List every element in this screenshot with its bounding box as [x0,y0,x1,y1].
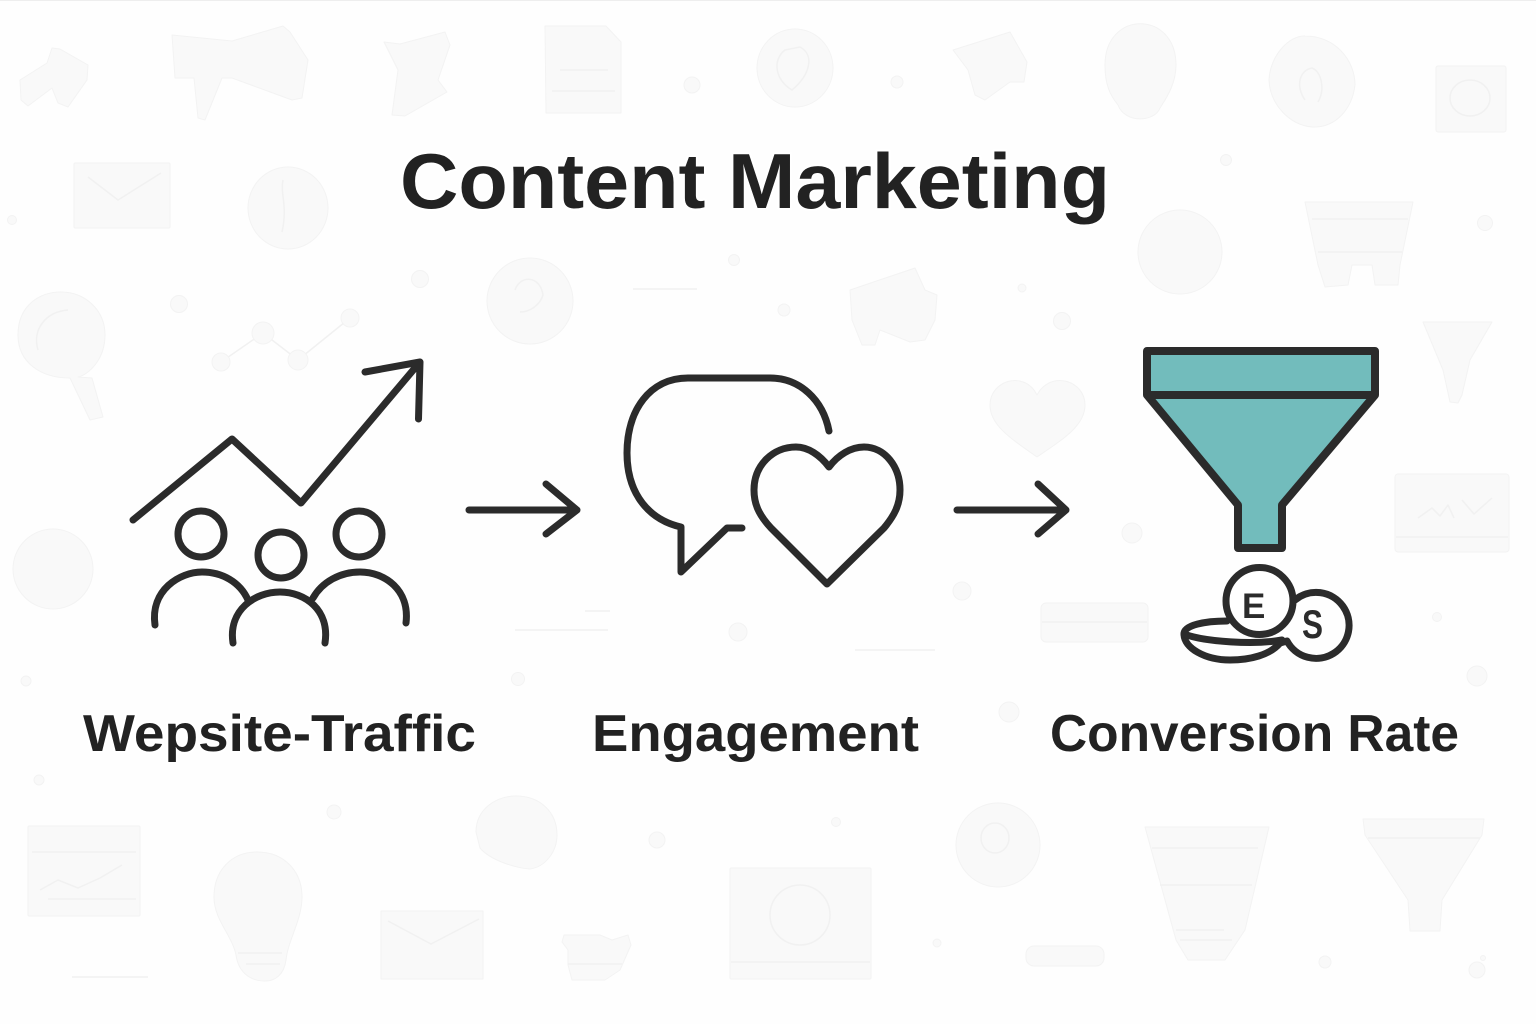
label: website traffic: Wepsite-Traffic [83,705,476,763]
growth arrow [133,362,420,520]
arrow: traffic to engagement [469,484,577,534]
arrow: engagement to conversion [957,484,1066,534]
icon: speech bubble and heart [627,378,900,584]
funnel [1147,351,1375,548]
label: conversion rate: Conversion Rate [1050,705,1459,763]
label: engagement: Engagement [592,705,919,763]
heart [754,447,900,584]
coins [1184,568,1349,660]
euro coin label: E [1242,587,1265,626]
icon: traffic growth chart with audience [133,362,420,643]
speech bubble [627,378,829,572]
dollar coin label: S [1302,603,1323,647]
audience of three people [154,511,406,643]
title: Content Marketing [400,137,1110,225]
icon: conversion funnel with coins [1147,351,1375,660]
